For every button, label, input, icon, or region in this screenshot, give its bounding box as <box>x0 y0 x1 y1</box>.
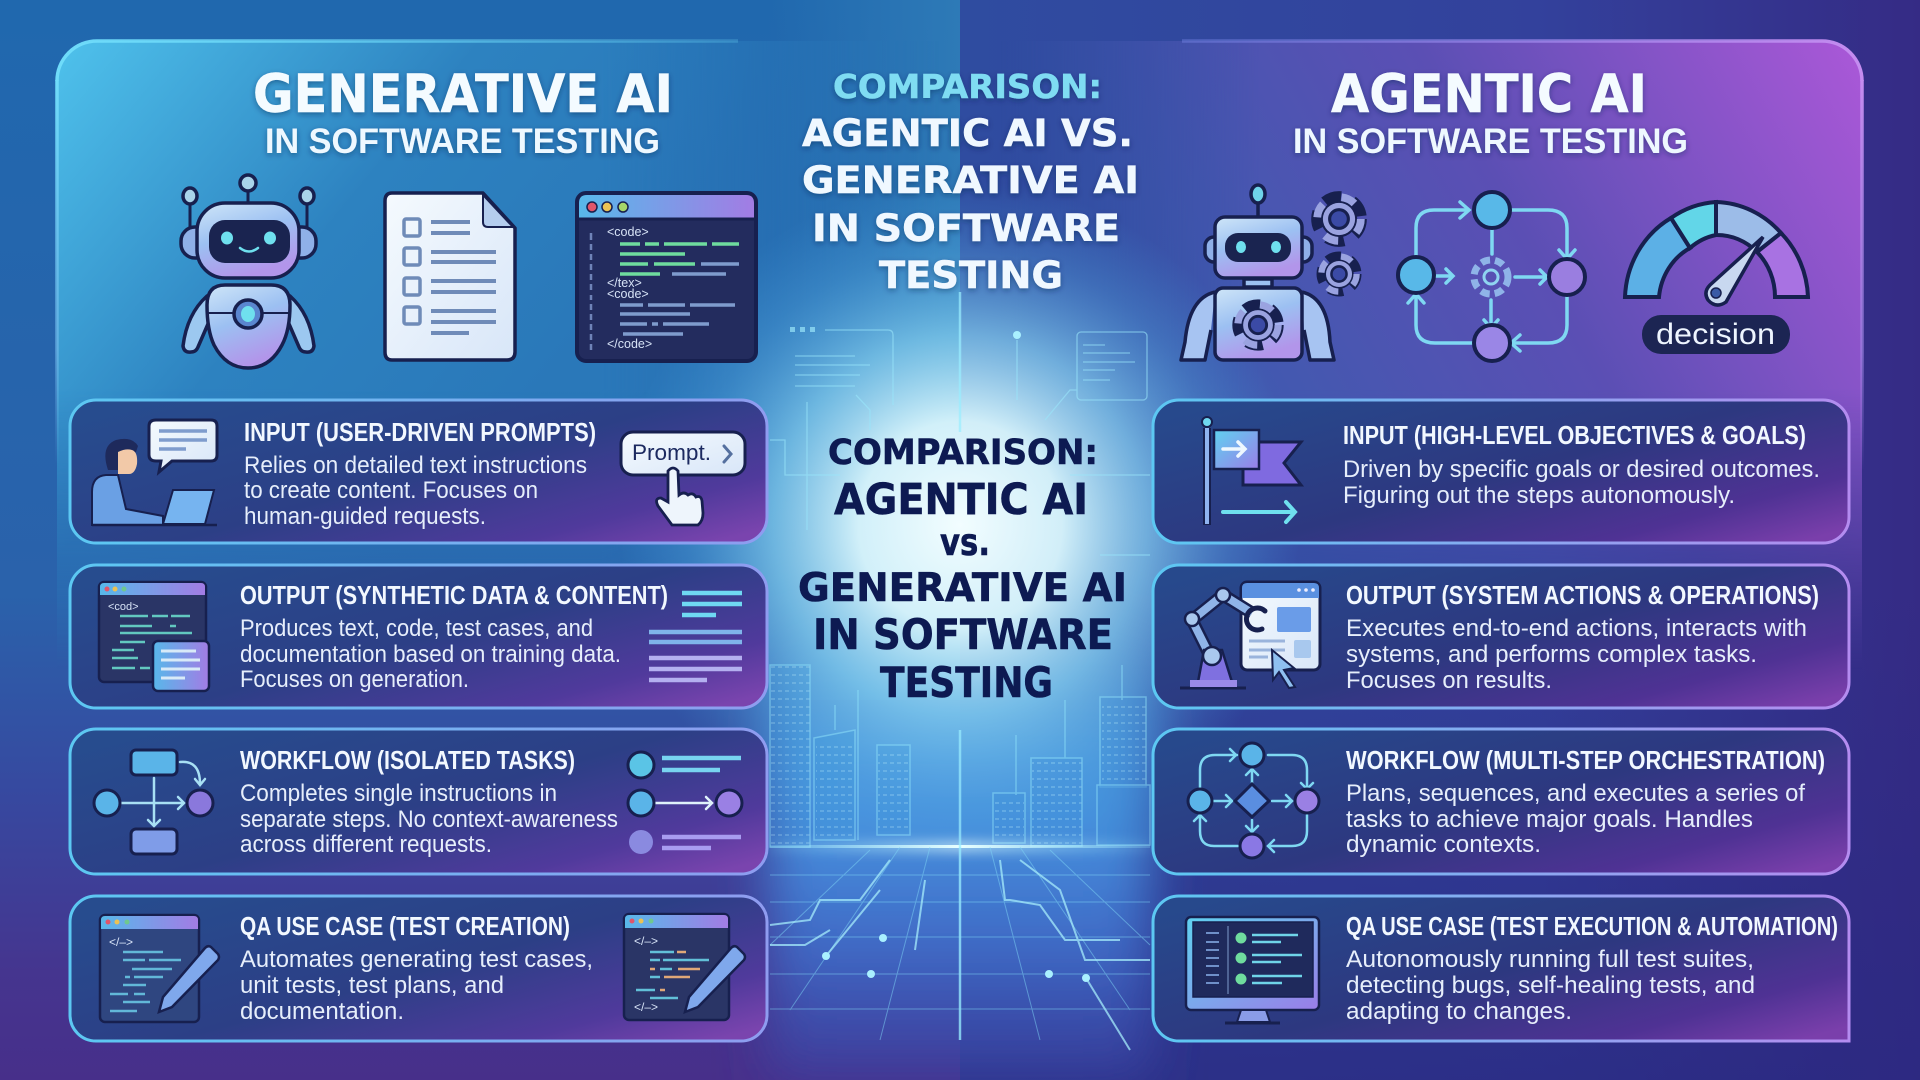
heading: agentic AI: IN SOFTWARE TESTING <box>1293 122 1688 161</box>
heading and body: output <box>240 580 668 693</box>
steps graphic <box>628 752 742 854</box>
panel: generative AI backdrop <box>55 39 776 592</box>
heading and body: input <box>244 417 596 530</box>
heading and body: output <box>1346 580 1819 694</box>
text lines graphic <box>649 593 742 680</box>
center top title: GENERATIVE AI <box>802 159 1139 202</box>
icon: monitor with test list <box>1186 917 1319 1023</box>
heading and body: input: INPUT (USER-DRIVEN PROMPTS) <box>244 417 596 447</box>
heading and body: output: Focuses on results. <box>1346 667 1552 694</box>
center glow and cityscape <box>620 180 1300 1080</box>
panel: workflow generative <box>70 729 767 874</box>
center title on glow: vs. <box>940 521 990 564</box>
icon: multi-step flow <box>1188 743 1319 858</box>
heading and body: output: Produces text, code, test cases, and <box>240 615 593 642</box>
icon: code window <box>577 193 756 361</box>
icon: goal flag <box>1202 417 1301 525</box>
heading and body: QA use case: detecting bugs, self-healing tests, and <box>1346 972 1755 999</box>
heading and body: output: systems, and performs complex tasks. <box>1346 641 1757 668</box>
panel: agentic AI backdrop <box>1108 39 1864 628</box>
icon: code window: <code> <box>607 287 649 301</box>
icon: code window: </code> <box>607 337 652 351</box>
heading and body: output: Executes end-to-end actions, interacts with <box>1346 615 1807 642</box>
panel: QA use case agentic <box>1153 896 1849 1041</box>
panel: input generative <box>70 400 767 543</box>
badge: decision: decision <box>1656 318 1775 351</box>
icon: second code editor with pen <box>624 914 745 1020</box>
center title on glow: COMPARISON: <box>828 433 1098 473</box>
heading and body: QA use case: unit tests, test plans, and <box>240 972 504 999</box>
heading and body: QA use case <box>1346 911 1838 1025</box>
heading: generative AI: IN SOFTWARE TESTING <box>265 122 660 161</box>
heading and body: workflow: WORKFLOW (MULTI-STEP ORCHESTRATION) <box>1346 745 1825 775</box>
center top title: IN SOFTWARE <box>812 207 1120 250</box>
center top title: COMPARISON: <box>833 67 1102 106</box>
heading and body: input: Driven by specific goals or desired outcomes. <box>1343 456 1820 483</box>
icon: code window and doc: <cod> <box>108 601 139 613</box>
icon: isolated flow <box>94 750 213 854</box>
heading and body: workflow: Completes single instructions in <box>240 780 557 807</box>
icon: friendly robot <box>181 175 316 368</box>
heading and body: QA use case: documentation. <box>240 998 404 1025</box>
heading and body: workflow: Plans, sequences, and executes a series of <box>1346 780 1805 807</box>
heading and body: input: to create content. Focuses on <box>244 477 538 504</box>
center top title <box>802 67 1139 297</box>
heading and body: workflow: tasks to achieve major goals. Handles <box>1346 806 1753 833</box>
icon: agent robot with gears <box>1181 185 1361 360</box>
heading and body: input: human-guided requests. <box>244 503 486 530</box>
panel: QA use case generative <box>70 896 767 1041</box>
heading and body: output: OUTPUT (SYSTEM ACTIONS & OPERATIONS) <box>1346 580 1819 610</box>
heading: agentic AI <box>1293 64 1688 161</box>
heading and body: workflow: across different requests. <box>240 831 492 858</box>
heading and body: QA use case: Autonomously running full test suites, <box>1346 946 1754 973</box>
center top title: TESTING <box>879 254 1063 297</box>
heading and body: workflow: dynamic contexts. <box>1346 831 1541 858</box>
icon: code editor with pen <box>100 915 219 1022</box>
heading and body: input: INPUT (HIGH-LEVEL OBJECTIVES & GOALS) <box>1343 420 1806 450</box>
icon: code window and doc <box>99 582 209 691</box>
icon: robot arm and window <box>1180 582 1320 688</box>
center title on glow <box>798 433 1127 707</box>
heading: generative AI: GENERATIVE AI <box>253 64 673 125</box>
badge: decision <box>1642 315 1790 354</box>
icon: second code editor with pen: </–> <box>634 934 658 948</box>
prompt button with cursor <box>621 432 745 525</box>
heading and body: input <box>1343 420 1820 509</box>
icon: code editor with pen: </–> <box>109 935 133 949</box>
heading and body: QA use case: adapting to changes. <box>1346 998 1572 1025</box>
prompt button with cursor: Prompt. <box>632 440 711 465</box>
icon: code window: </tex> <box>607 276 642 290</box>
heading and body: output: documentation based on training data. <box>240 641 621 668</box>
heading and body: input: Relies on detailed text instructions <box>244 452 587 479</box>
center top title: AGENTIC AI VS. <box>802 112 1133 155</box>
panel: output generative <box>70 565 767 708</box>
heading and body: QA use case: Automates generating test cases, <box>240 946 593 973</box>
heading and body: workflow <box>240 745 618 858</box>
icon: person at laptop <box>92 420 217 525</box>
heading and body: input: Figuring out the steps autonomously. <box>1343 482 1735 509</box>
panel: input agentic <box>1153 400 1849 543</box>
heading: generative AI <box>253 64 673 161</box>
heading and body: QA use case <box>240 911 593 1025</box>
heading and body: output: OUTPUT (SYNTHETIC DATA & CONTENT) <box>240 580 668 610</box>
heading and body: workflow: WORKFLOW (ISOLATED TASKS) <box>240 745 575 775</box>
heading and body: QA use case: QA USE CASE (TEST CREATION) <box>240 911 570 941</box>
icon: code window: <code> <box>607 225 649 239</box>
icon: second code editor with pen: </–> <box>634 1000 658 1014</box>
heading: agentic AI: AGENTIC AI <box>1331 64 1647 125</box>
center title on glow: GENERATIVE AI <box>798 566 1127 611</box>
heading and body: output: Focuses on generation. <box>240 666 469 693</box>
heading and body: workflow: separate steps. No context-awareness <box>240 806 618 833</box>
icon: decision gauge <box>1625 202 1808 305</box>
panel: output agentic <box>1153 565 1849 708</box>
center title on glow: TESTING <box>880 658 1053 707</box>
heading and body: workflow <box>1346 745 1825 858</box>
icon: document checklist <box>385 193 515 360</box>
center title on glow: AGENTIC AI <box>834 475 1088 525</box>
icon: orchestration loop <box>1398 192 1585 361</box>
center title on glow: IN SOFTWARE <box>813 610 1113 659</box>
panel: workflow agentic <box>1153 729 1849 874</box>
